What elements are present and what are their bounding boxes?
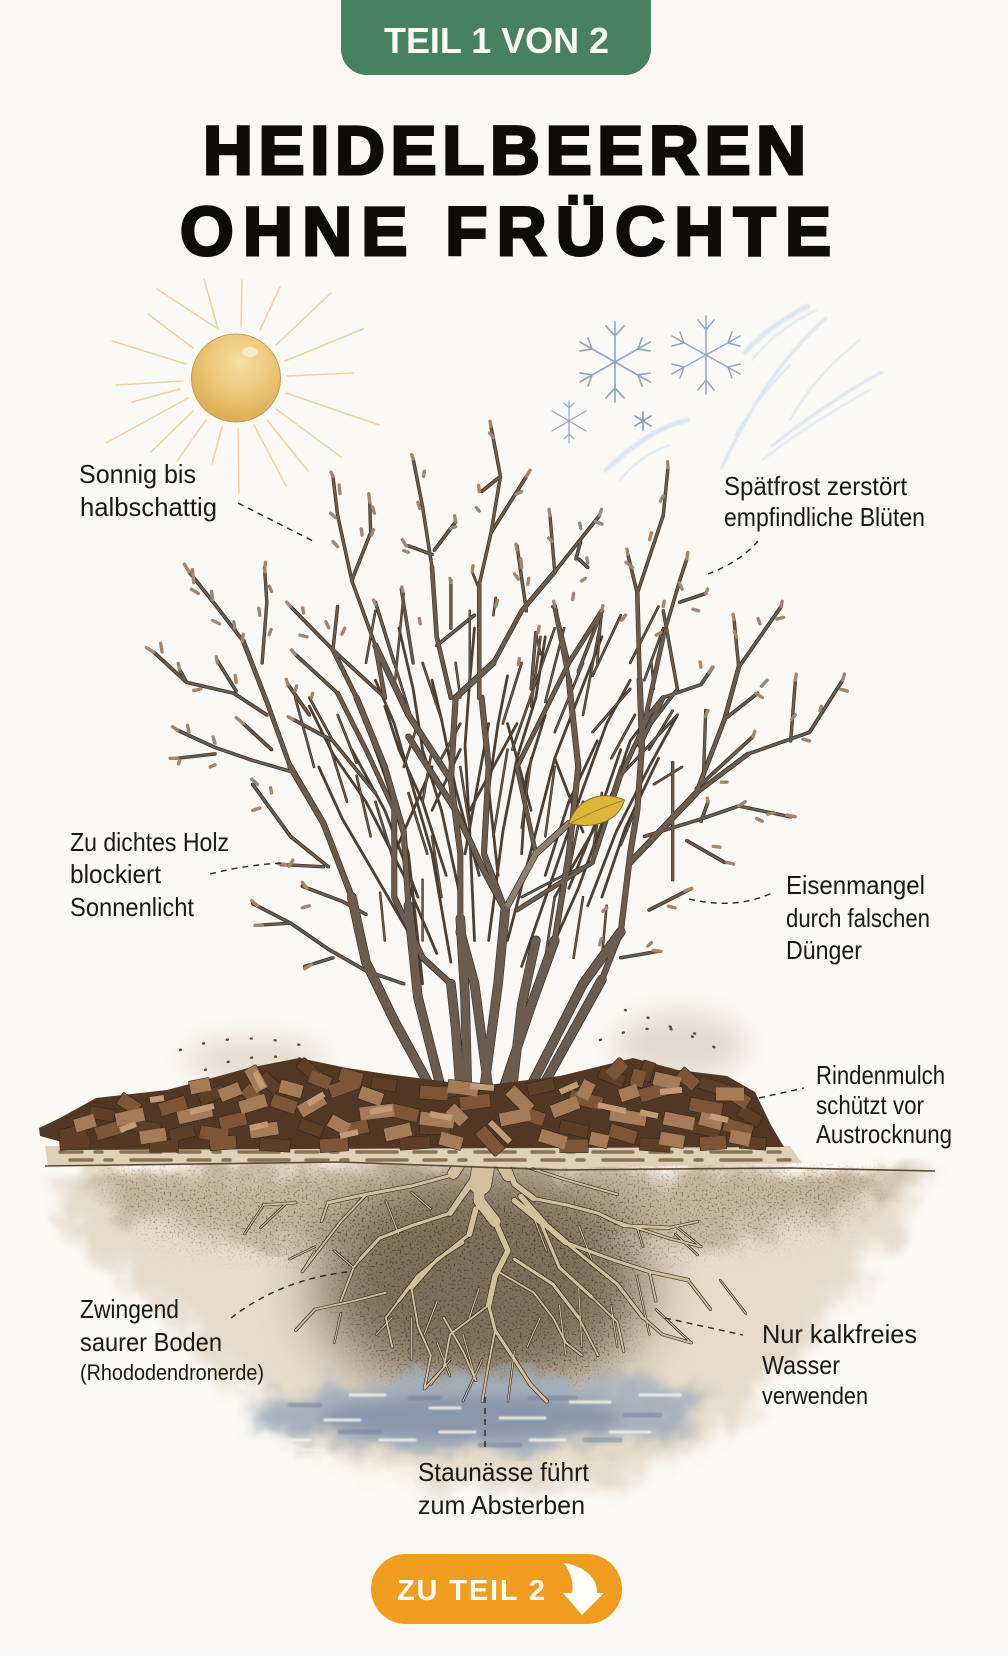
- label: Sonnig bis halbschattig: [79, 459, 217, 522]
- label: Sonnig bis halbschattig: Sonnig bis: [79, 459, 196, 489]
- label: Rindenmulch: Rindenmulch: [816, 1060, 945, 1090]
- badge: Teil 1 von 2: TEIL 1 VON 2: [384, 20, 609, 61]
- illustration: bush branches: [154, 427, 843, 1090]
- icon: snowflake small: [552, 401, 586, 443]
- label: Spätfrost: empfindliche Blüten: [724, 502, 925, 532]
- label: kalkfreies Wasser: Nur kalkfreies: [762, 1319, 917, 1349]
- icon: frost streaks: [606, 306, 882, 480]
- badge: Teil 1 von 2: [341, 0, 651, 75]
- illustration: bush buds: [147, 421, 847, 969]
- leader: frost: [708, 541, 758, 574]
- leader: mulch: [759, 1088, 804, 1098]
- illustration: roots: [244, 1154, 746, 1401]
- icon: snowflake tiny: [635, 412, 651, 430]
- label: kalkfreies Wasser: Wasser: [762, 1350, 840, 1380]
- label: Sonnig bis halbschattig: halbschattig: [80, 492, 217, 522]
- leader: soil: [231, 1272, 347, 1318]
- label: Spätfrost: Spätfrost zerstört: [724, 471, 908, 501]
- illustration: soil wash above mulch: [180, 1010, 745, 1080]
- ground band: [45, 1146, 935, 1171]
- title: [180, 112, 831, 270]
- label: Rindenmulch: Austrocknung: [816, 1119, 952, 1149]
- title: OHNE FRÜCHTE: [180, 193, 831, 270]
- label: Eisenmangel: [786, 870, 930, 965]
- illustration: back branches: [309, 628, 677, 984]
- icon: snowflake large left: [580, 322, 650, 402]
- label: Staunässe: [418, 1457, 590, 1520]
- bark chips: [60, 1062, 766, 1152]
- label: dichtes Holz: [70, 827, 229, 922]
- button: Zu Teil 2: ZU TEIL 2: [397, 1575, 545, 1607]
- label: Eisenmangel: Eisenmangel: [786, 870, 925, 900]
- illustration: soil cross-section: [50, 1168, 925, 1488]
- label: kalkfreies Wasser: [762, 1319, 917, 1410]
- label: dichtes Holz: blockiert: [70, 859, 162, 889]
- label: Eisenmangel: durch falschen: [786, 903, 930, 933]
- label: Rindenmulch: [816, 1060, 952, 1149]
- label: Eisenmangel: Dünger: [786, 935, 862, 965]
- label: Spätfrost: [724, 471, 925, 532]
- icon: sun with rays: [106, 279, 379, 493]
- button: Zu Teil 2: [371, 1554, 622, 1624]
- title: HEIDELBEEREN: [203, 112, 806, 189]
- leader: iron: [689, 893, 772, 903]
- label: dichtes Holz: Sonnenlicht: [70, 892, 195, 922]
- label: saurer Boden: Zwingend: [80, 1294, 179, 1324]
- leader: wood: [210, 863, 286, 874]
- leader: sun: [238, 503, 315, 542]
- label: Staunässe: zum Absterben: [418, 1490, 585, 1520]
- label: Staunässe: Staunässe führt: [418, 1457, 590, 1487]
- illustration: mulch layer: [39, 1058, 935, 1171]
- icon: yellow leaf: [569, 796, 625, 825]
- leader: water: [665, 1318, 743, 1335]
- icon: snowflake large right: [672, 316, 740, 394]
- icon: curved arrow: [563, 1563, 604, 1615]
- leader: waterlogging: [484, 1397, 486, 1452]
- label: saurer Boden: (Rhododendronerde): [80, 1360, 264, 1385]
- label: Rindenmulch: schützt vor: [816, 1090, 924, 1120]
- label: saurer Boden: saurer Boden: [80, 1327, 222, 1357]
- label: kalkfreies Wasser: verwenden: [762, 1383, 868, 1410]
- illustration: standing water: [253, 1374, 703, 1450]
- label: saurer Boden: [80, 1294, 264, 1385]
- label: dichtes Holz: Zu dichtes Holz: [70, 827, 229, 857]
- mulch base: [39, 1058, 784, 1150]
